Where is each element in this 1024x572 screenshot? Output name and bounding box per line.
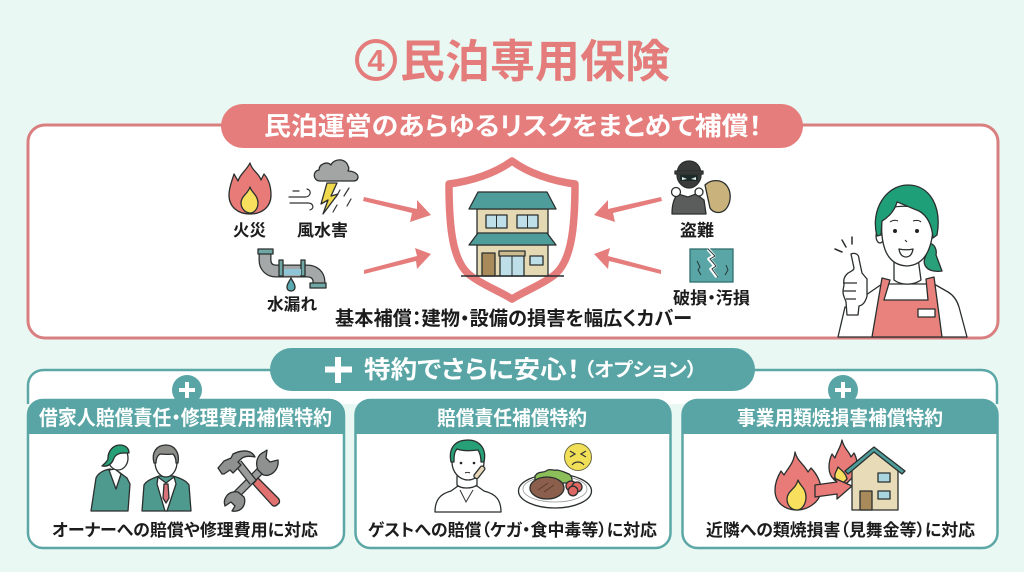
arrow: damage to shield [594,248,661,274]
icon: storm [289,160,358,214]
caption: tenant liability: オーナーへの賠償や修理費用に対応 [52,521,318,540]
icon: house [461,192,564,276]
name tag [918,309,935,317]
card header: liability: 賠償責任補償特約 [437,407,587,430]
face [882,206,933,266]
icon: food on plate [518,470,592,508]
heading pill: options: 特約でさらに安心！ [364,356,580,384]
icon: fire [229,163,271,214]
plus badge: right [828,375,858,405]
label: theft: 盗難 [680,221,715,240]
icon: leaking pipe [258,249,326,291]
icon: cracked wall [690,249,733,282]
sparkle [835,237,852,252]
panel: basic coverage [28,104,998,338]
icon: thief [672,161,730,214]
icon: spreading fire and house [775,440,905,510]
text: basic coverage summary: 基本補償：建物・設備の損害を幅広くカバー [335,307,692,330]
ponytail [924,243,942,271]
card: tenant liability [27,399,345,548]
label: leak: 水漏れ [267,295,318,314]
arrow: fire and storm to shield [363,197,431,222]
card header: neighbor fire [682,399,998,434]
apron [872,277,942,337]
finger lines [843,283,857,299]
panel: optional riders [27,348,998,548]
figure: bowing woman [91,445,130,511]
figure: injured guest [435,440,501,512]
ears [876,229,884,243]
title: 4 [367,43,385,78]
plus badge: left [172,375,202,405]
icon: sick face [564,444,592,470]
heading pill: basic coverage [221,104,803,148]
label: fire: 火災 [233,222,266,240]
hair [875,185,938,238]
thumbs-up hand [843,253,867,315]
heading pill: basic coverage: 民泊運営のあらゆるリスクをまとめて補償！ [264,113,762,141]
character: woman in apron [835,185,967,337]
figure: owner man [142,445,191,511]
card header: liability [354,399,672,434]
card: liability [354,399,672,548]
arrow: theft to shield [594,197,662,222]
heading pill: options: （オプション） [584,359,697,381]
label: storm: 風水害 [297,221,348,240]
icon: hammer and wrench [218,450,280,511]
title: 民泊専用保険 [400,36,670,87]
card: neighbor fire [682,399,998,548]
label: damage: 破損・汚損 [673,289,750,308]
card header: neighbor fire: 事業用類焼損害補償特約 [737,407,943,430]
arrow: leak to shield [364,248,431,274]
neck [894,258,921,284]
icon: shield [449,161,575,299]
body [838,284,967,337]
card header: tenant liability [27,399,345,434]
heading pill: options [270,348,755,391]
card header: tenant liability: 借家人賠償責任・修理費用補償特約 [39,407,332,430]
caption: liability: ゲストへの賠償（ケガ・食中毒等）に対応 [368,520,657,540]
caption: neighbor fire: 近隣への類焼損害（見舞金等）に対応 [706,520,975,540]
